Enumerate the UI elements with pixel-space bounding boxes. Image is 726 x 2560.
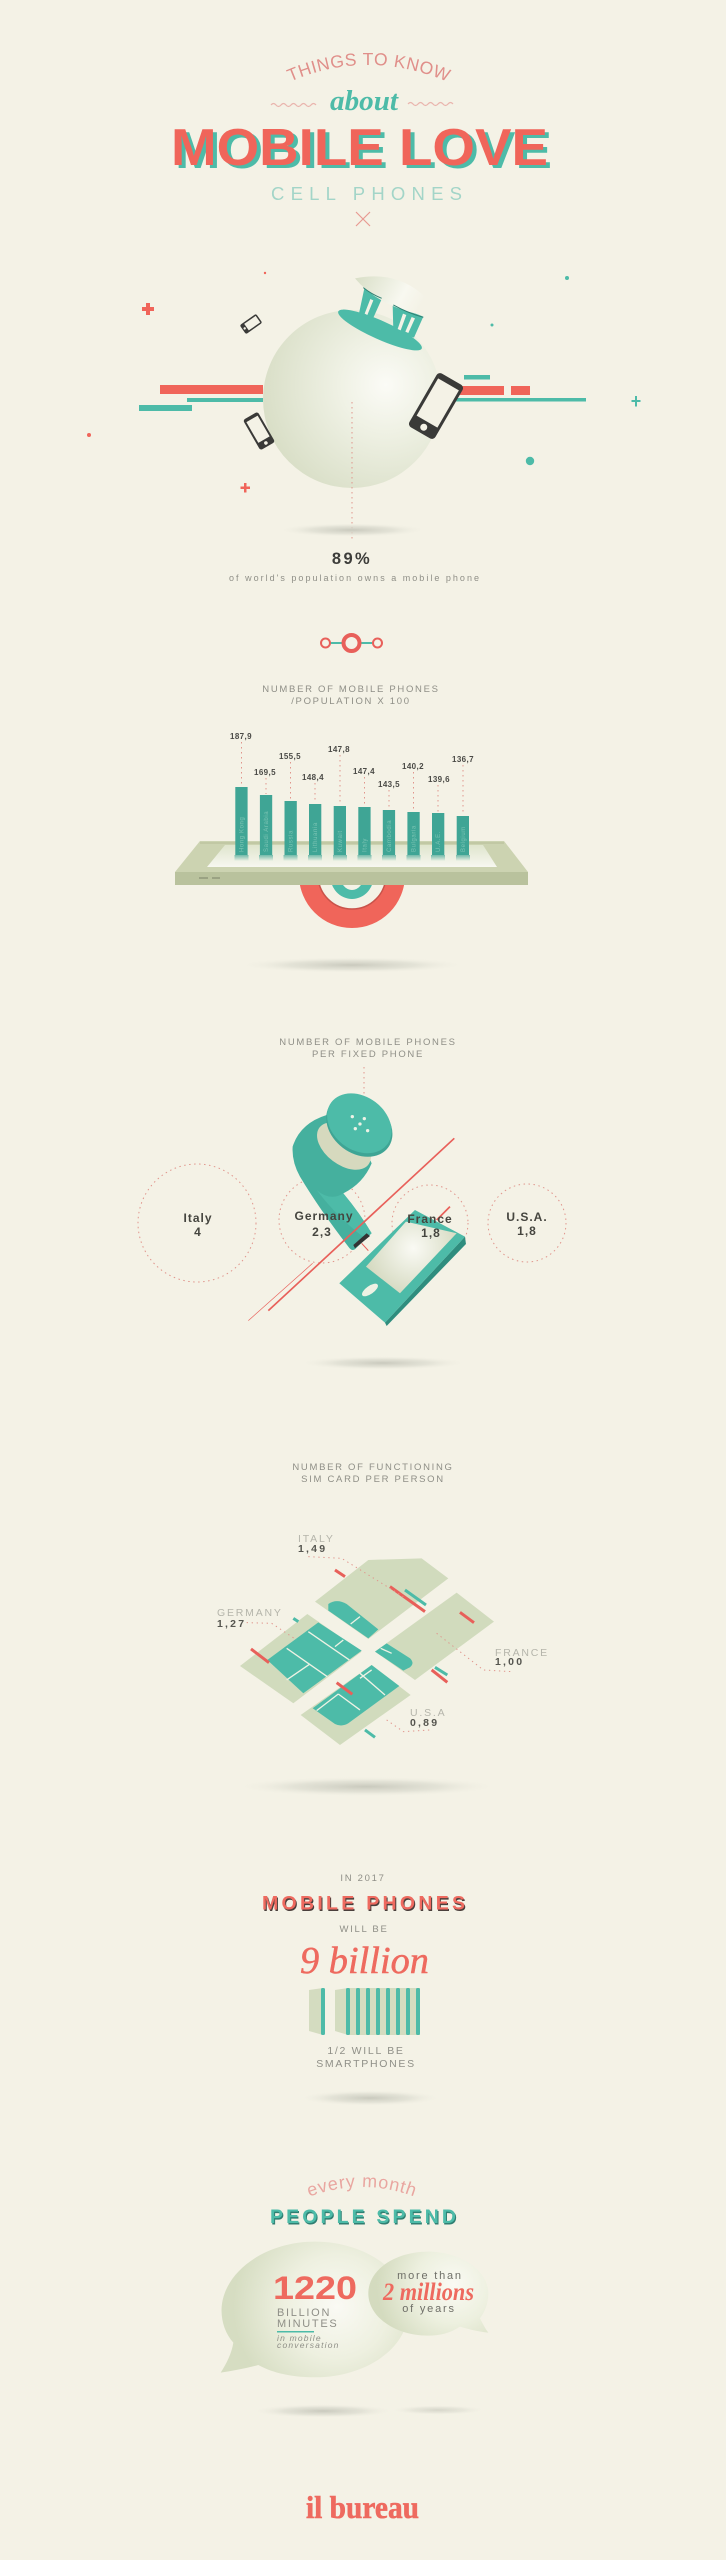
icon: small phone top [240,314,262,334]
country labels: 1,8 [421,1226,441,1240]
bar values: 139,6 [428,775,450,784]
ground shadow [277,523,427,537]
country labels [183,1209,548,1240]
text: 1220 billion minutes: 1220 [273,2270,357,2306]
globe illustration [87,272,640,542]
bar country labels: Kuwait [338,830,344,852]
text: 9 billion: 9 billion [300,1940,429,1982]
bar values: 155,5 [279,752,301,761]
mobile handset [339,1210,466,1326]
half rings below phone [299,875,405,928]
title: about: about [330,85,399,117]
label: italy [298,1533,335,1555]
text: 2 millions of years: 2 millions [382,2279,474,2306]
speech bubbles [221,2242,488,2377]
stat: 89 percent [229,550,479,583]
country labels: 1,8 [517,1224,537,1238]
text: 1220 billion minutes: MINUTES [277,2318,338,2330]
dotted drop line [351,402,353,542]
bar country labels [240,811,467,852]
text: every month: every month [308,2177,416,2196]
heading: per fixed phone: PER FIXED PHONE [312,1049,424,1060]
title: mobile love: MOBILE LOVE [175,122,552,180]
text: 1220 billion minutes [273,2270,357,2350]
bubble left [221,2242,408,2377]
decorative bars [139,375,586,411]
sparkles [87,272,266,492]
label: france: FRANCE [495,1647,549,1659]
text: 2 millions of years: more than [397,2270,463,2282]
dotted leaders [247,1557,512,1732]
heading: sim cards: NUMBER OF FUNCTIONING [292,1462,454,1473]
icon: cross [356,212,370,226]
france card [375,1593,494,1680]
fixed phone comparison [138,1067,566,1370]
section: every month [221,2177,488,2416]
ground shadow [237,957,467,973]
title: mobile love: MOBILE LOVE [171,119,548,177]
logo: il bureau: il bureau [306,2489,419,2525]
subtitle: cell phones: CELL PHONES [271,183,462,204]
section: 2017 forecast [262,1873,466,2106]
bar values: 148,4 [302,773,324,782]
heading: phones per population: /POPULATION X 100 [291,696,411,707]
icon: large phone right [408,372,464,440]
ground shadows [251,2404,486,2418]
heading: per fixed phone [279,1037,457,1060]
bar country labels: Russia [289,830,295,852]
heading: mobile phones: MOBILE PHONES [262,1892,465,1914]
bar values: 136,7 [452,755,474,764]
bar values: 140,2 [402,762,424,771]
bar values: 147,4 [353,767,375,776]
red diagonal lines [248,1138,454,1321]
label: usa: U.S.A [410,1707,446,1719]
heading: mobile phones: MOBILE PHONES [263,1894,466,1916]
country labels: Italy [183,1211,213,1225]
heading: people spend: PEOPLE SPEND [270,2206,456,2228]
stat: 89 percent: of world's population owns a mobile phone [229,573,479,583]
text: half smartphones [316,2045,416,2070]
ground shadow [298,1356,468,1370]
label: usa [410,1707,446,1729]
heading: people spend: PEOPLE SPEND [271,2208,457,2230]
sphere [263,310,441,488]
bar country labels: Saudi Arabia [264,811,270,852]
label: germany [217,1607,283,1630]
title block [171,53,552,226]
bubble right [368,2252,488,2336]
bar country labels: Italy [362,838,368,852]
bar values: 143,5 [378,780,400,789]
icon: small phone left [243,412,275,450]
bar values [230,732,474,789]
barcode of phones [309,1988,420,2035]
bar country labels: Cambodia [387,820,393,852]
label: germany: 1,27 [217,1618,246,1630]
text: half smartphones: SMARTPHONES [316,2058,416,2070]
accent sticks [251,1570,474,1737]
handset earpiece [293,1081,405,1250]
text: 1220 billion minutes: in mobile [277,2333,322,2343]
country labels: U.S.A. [506,1210,548,1224]
ground shadow [298,2090,442,2106]
text: 1220 billion minutes: BILLION [277,2307,331,2319]
bar country labels: Bulgaria [412,825,418,852]
bar values: 147,8 [328,745,350,754]
stat: 89 percent: 89% [332,550,372,568]
bars [235,787,469,855]
bar country labels: Hong Kong [240,817,246,852]
bar values: 169,5 [254,768,276,777]
sim card illustration [233,1557,512,1797]
text: 1220 billion minutes: conversation [277,2340,340,2350]
text: half smartphones: 1/2 WILL BE [327,2045,405,2057]
italy card [315,1558,448,1639]
heading: sim cards [292,1462,454,1485]
text: 2 millions of years: of years [402,2303,456,2315]
bar country labels: Belgium [461,826,467,852]
wavy ornaments [271,102,453,106]
country labels: France [407,1212,453,1226]
heading: phones per population [262,684,440,707]
handset illustration [248,1081,466,1326]
heading: phones per population: NUMBER OF MOBILE PHONES [262,684,440,695]
heading: per fixed phone: NUMBER OF MOBILE PHONES [279,1037,457,1048]
country labels: Germany [294,1209,354,1223]
label: italy: ITALY [298,1533,335,1545]
country labels: 2,3 [312,1225,332,1239]
germany card [240,1614,362,1703]
bar country labels: Lithuania [313,822,319,852]
label: france: 1,00 [495,1656,524,1668]
phone body [175,841,528,885]
text: will be: WILL BE [339,1924,389,1935]
label: germany: GERMANY [217,1607,283,1619]
text: 2 millions of years [382,2270,474,2315]
title: things to know: THINGS TO KNOW [286,53,452,80]
label: usa: 0,89 [410,1717,439,1729]
text: in 2017: IN 2017 [340,1873,386,1884]
heading: sim cards: SIM CARD PER PERSON [301,1474,445,1485]
bar reflections [234,855,470,861]
dish on top of sphere [334,276,431,357]
country labels: 4 [194,1225,202,1239]
bar country labels: U.A.E. [436,831,442,852]
bar values: 187,9 [230,732,252,741]
label: italy: 1,49 [298,1543,327,1555]
sim labels [217,1533,549,1729]
bar leader lines [242,742,463,815]
bar chart on phone [175,732,528,973]
dotted circles [138,1067,566,1282]
icon: connected rings divider [321,635,382,651]
ground shadow [233,1777,500,1797]
usa card [301,1665,411,1745]
label: france [495,1647,549,1668]
